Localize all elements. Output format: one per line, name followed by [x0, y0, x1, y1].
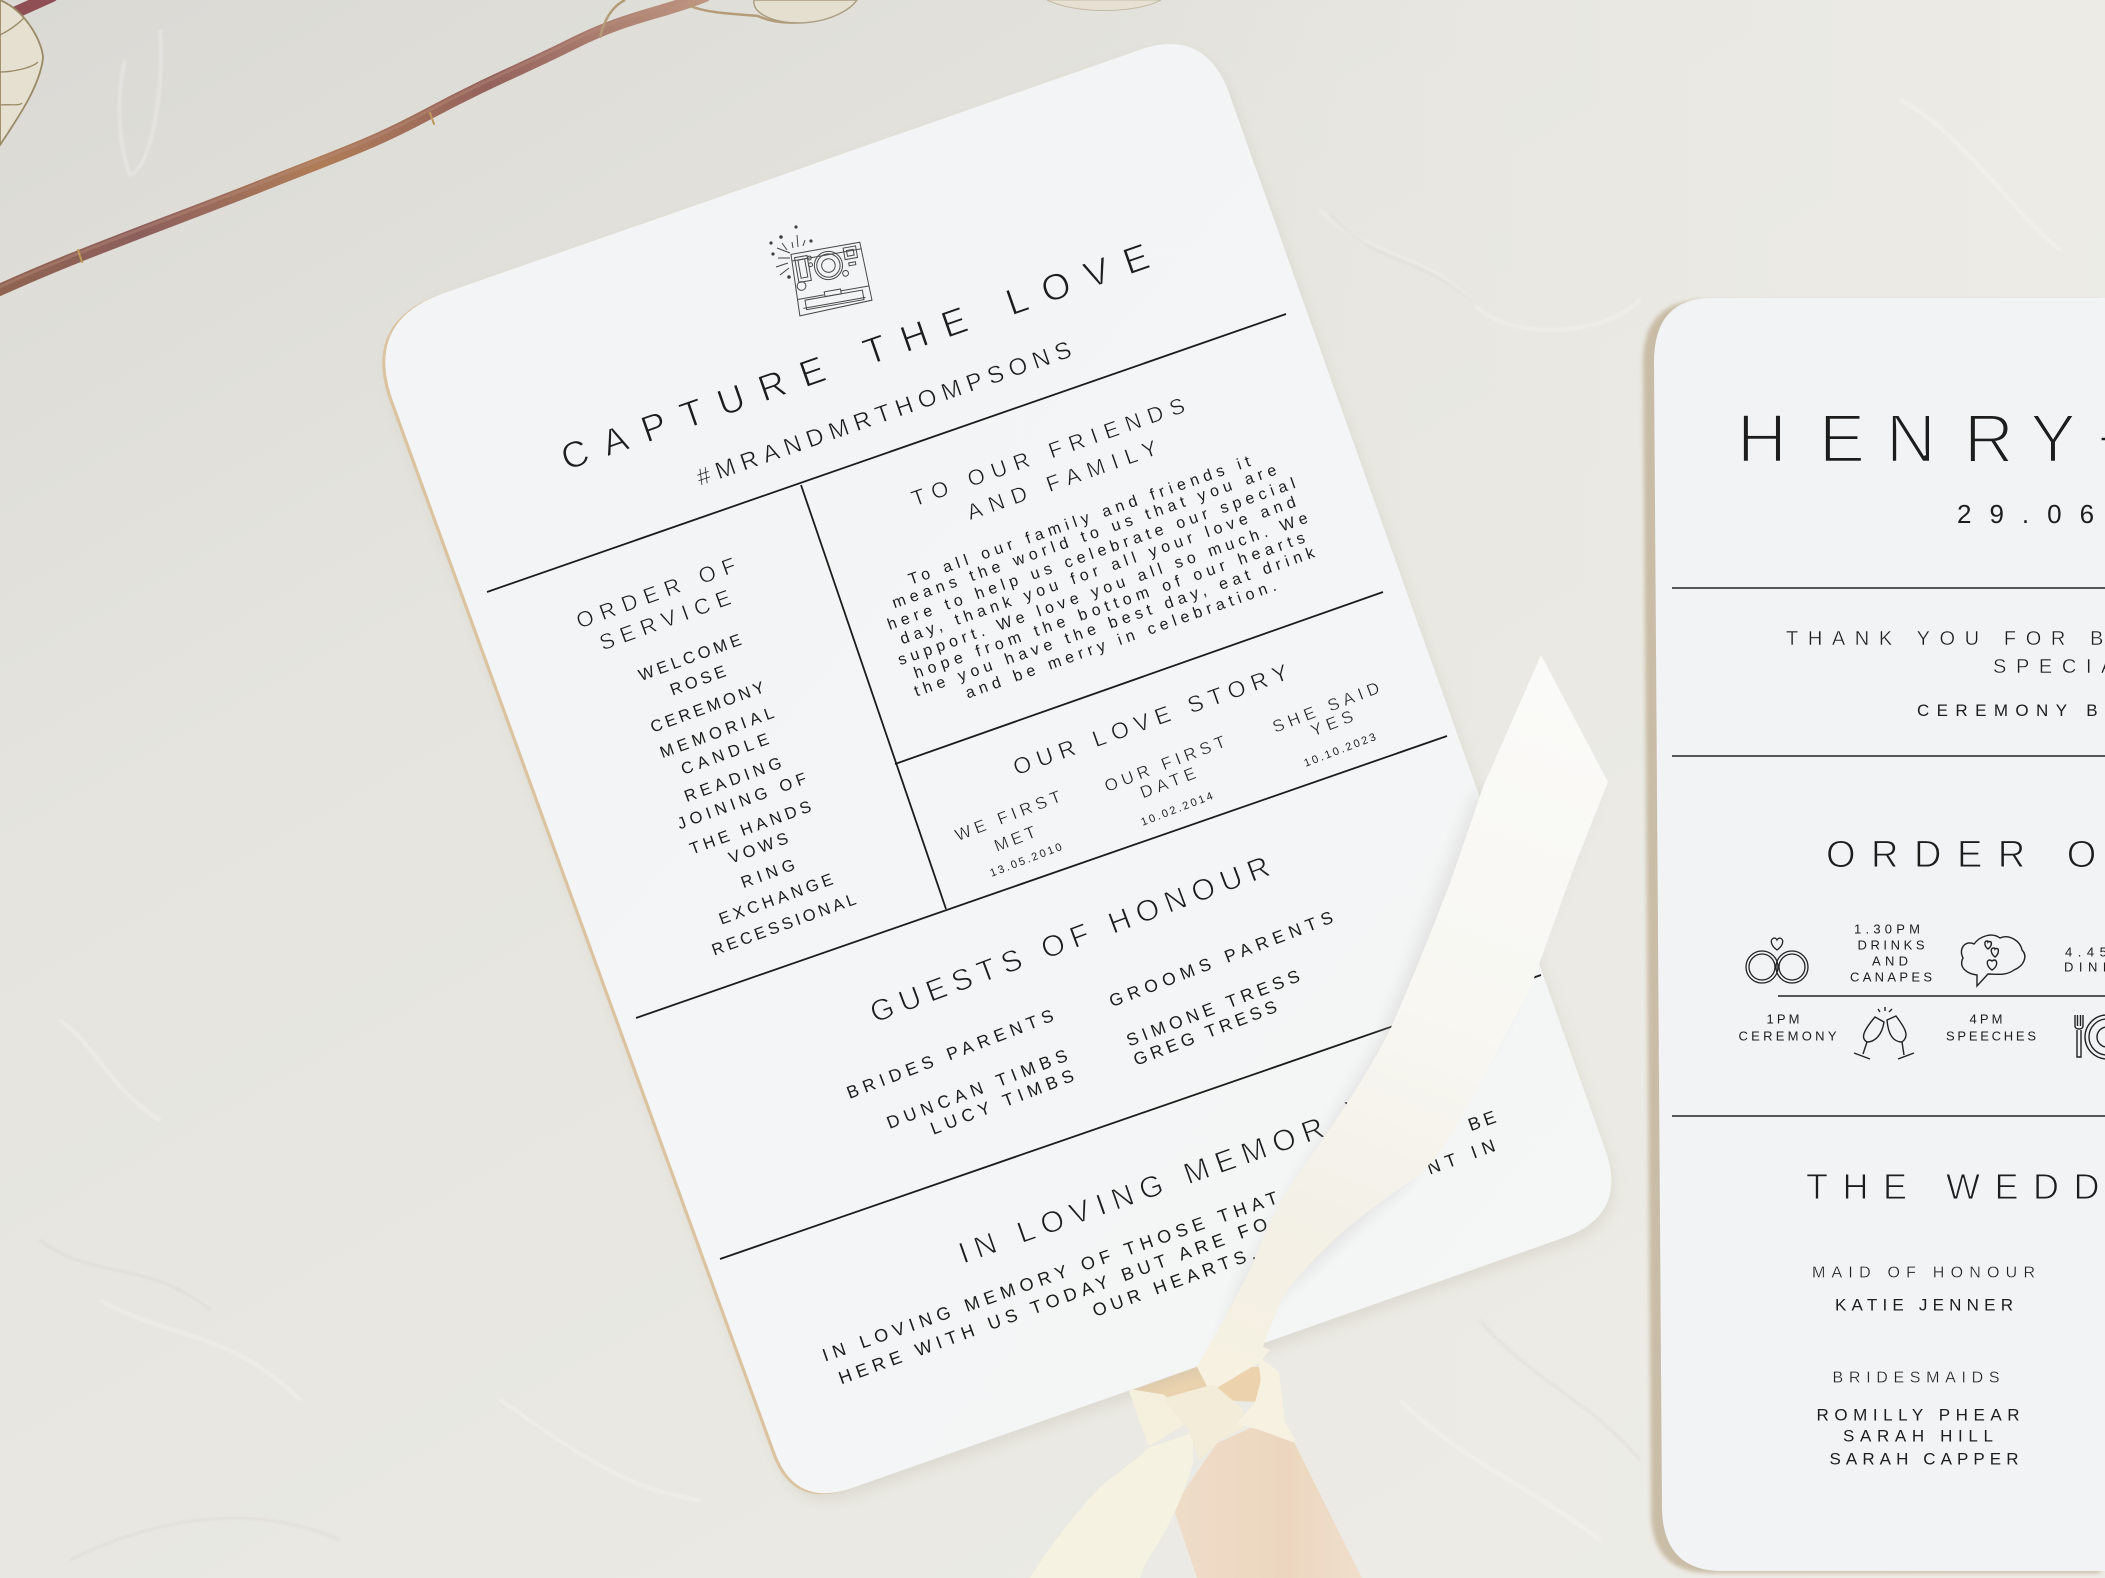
heading: our love story: OUR LOVE STORY: [1009, 659, 1292, 780]
message body: support. We love you all so much. We: [896, 510, 1310, 669]
milestone: we first met: 13.05.2010: [988, 841, 1064, 880]
heading: to our friends: AND FAMILY: [964, 435, 1161, 525]
milestone: we first met: [952, 787, 1064, 880]
icon: champagne toast: [1854, 1007, 1914, 1059]
service list: JOINING OF: [675, 770, 809, 833]
maid of honour: MAID OF HONOUR: [1812, 1264, 2035, 1282]
grooms parents: GROOMS PARENTS: [1106, 907, 1336, 1011]
heading: in loving memory: Y: [1341, 1091, 1371, 1129]
timeline: drinks and canapes: DRINKS: [1858, 938, 1925, 952]
service list: MEMORIAL: [658, 704, 776, 762]
dividers: [1672, 588, 2105, 1116]
wooden fan stick: top section: [1133, 1367, 1262, 1402]
service list: VOWS: [726, 829, 791, 868]
card shadow: [387, 51, 1613, 1500]
card edge: [382, 45, 1608, 1494]
grooms parents: SIMONE TRESS: [1124, 966, 1302, 1050]
timeline: speeches: 4PM: [1970, 1012, 2002, 1026]
wooden fan stick: [1173, 1427, 1362, 1578]
panel: wedding programme card: [1654, 298, 2105, 1571]
icon: fork and plate: [2075, 1015, 2105, 1059]
brides parents: DUNCAN TIMBS: [884, 1045, 1070, 1133]
timeline: ceremony: CEREMONY: [1738, 1028, 1837, 1044]
milestone: our first date: [1102, 732, 1228, 829]
message body: means the world to us that you are: [890, 462, 1279, 612]
message body: hope from the bottom of our hearts: [912, 530, 1307, 682]
icon: instant camera: [770, 226, 872, 316]
heading: order of service: SERVICE: [596, 585, 734, 655]
heading: guests of honour: GUESTS OF HONOUR: [866, 850, 1274, 1030]
timeline: ceremony: 1PM: [1766, 1012, 1800, 1026]
milestone: our first date: DATE: [1138, 764, 1198, 802]
brides parents: BRIDES PARENTS: [844, 1005, 1056, 1103]
dividers: [487, 314, 1541, 1259]
maid of honour: [1812, 1264, 2035, 1314]
panel: order of service: [573, 553, 858, 959]
icon: speech cloud with hearts: [1961, 935, 2025, 986]
timeline: drinks and canapes: 1.30PM: [1854, 922, 1920, 936]
right card shadow: [1643, 300, 2100, 1573]
service list: CANDLE: [679, 730, 771, 779]
thank you message: [1786, 628, 2105, 678]
service list: RING: [739, 856, 797, 892]
service list: READING: [682, 754, 784, 806]
panel: fan card: [385, 44, 1611, 1493]
heading: capture the love: CAPTURE THE LOVE: [556, 236, 1154, 478]
service list: ROSE: [668, 663, 728, 699]
milestone: we first met: MET: [992, 822, 1038, 856]
brides parents: [844, 1005, 1077, 1139]
bridesmaids: SARAH HILL: [1843, 1426, 1993, 1446]
heading: to our friends: TO OUR FRIENDS: [908, 393, 1188, 511]
heading: the wedding party: THE WEDD: [1806, 1166, 2105, 1207]
timeline: ceremony: [1738, 1012, 1837, 1044]
panel: to our friends and family: [885, 393, 1318, 702]
panel: in loving memory: [820, 1091, 1499, 1388]
message body: the you have the best day, eat drink: [912, 544, 1318, 700]
bridesmaids: ROMILLY PHEAR: [1816, 1406, 2020, 1424]
service list: WELCOME: [636, 631, 744, 685]
memorial message: REVER PRESE: [1286, 1166, 1410, 1228]
milestone: our first date: 10.02.2014: [1139, 790, 1215, 829]
bridesmaids: [1816, 1370, 2020, 1468]
message body: day, thank you for all your love and: [898, 494, 1298, 648]
memorial message: NT IN: [1424, 1135, 1498, 1179]
ribbon tail: [1030, 1433, 1193, 1578]
ribbon: [1197, 655, 1608, 1392]
dried stem branch: [0, 0, 705, 292]
timeline: drinks and canapes: AND: [1872, 954, 1908, 968]
timeline: speeches: SPEECHES: [1946, 1028, 2036, 1044]
service list: THE HANDS: [687, 798, 814, 858]
grooms parents: GREG TRESS: [1130, 996, 1280, 1070]
milestone: she said yes: YES: [1308, 707, 1356, 740]
memorial message: CANNOT: [1339, 1136, 1431, 1184]
service list: RECESSIONAL: [710, 891, 858, 959]
bridesmaids: SARAH CAPPER: [1830, 1450, 2018, 1468]
heading: in loving memory: IN LOVING MEMOR: [954, 1111, 1329, 1271]
message body: [885, 453, 1318, 702]
panel: guests of honour: [844, 850, 1336, 1139]
grooms parents: [1106, 907, 1336, 1070]
heading: order of: ORDER O: [1826, 834, 2105, 876]
bridesmaids: BRIDESMAIDS: [1832, 1370, 2000, 1386]
timeline: drinks and canapes: [1850, 922, 1932, 984]
milestone: she said yes: 10.10.2023: [1302, 731, 1378, 770]
memorial message: BE: [1465, 1107, 1499, 1135]
service list: EXCHANGE: [717, 871, 835, 928]
service list: CEREMONY: [648, 679, 767, 736]
milestone: we first met: WE FIRST: [952, 787, 1064, 845]
memorial message: IN LOVING MEMORY OF THOSE THAT: [820, 1188, 1280, 1365]
hashtag: #MRANDMRTHOMPSONS: [693, 336, 1075, 492]
maid of honour: KATIE JENNER: [1835, 1296, 2013, 1314]
milestone: she said yes: [1270, 678, 1382, 770]
seed pods: [0, 0, 1161, 145]
icon: wedding rings: [1746, 938, 1808, 983]
milestone: our first date: OUR FIRST: [1102, 732, 1228, 796]
memorial message: [820, 1107, 1499, 1388]
memorial message: OUR HEARTS.: [1090, 1243, 1258, 1321]
panel: our love story: [952, 659, 1382, 880]
heading: order of service: ORDER OF: [573, 553, 739, 633]
memorial message: HERE WITH US TODAY BUT ARE FO: [836, 1214, 1270, 1388]
ribbon shadow: [1201, 788, 1599, 1396]
thank you message: THANK YOU FOR B: [1786, 628, 2105, 650]
service list: [636, 631, 858, 959]
timeline: speeches: [1946, 1012, 2036, 1044]
message body: To all our family and friends it: [906, 453, 1253, 589]
message body: here to help us celebrate our special: [885, 475, 1298, 634]
milestone: she said yes: SHE SAID: [1270, 678, 1382, 737]
message body: and be merry in celebration.: [963, 578, 1279, 702]
timeline: dinner: [2064, 945, 2105, 975]
timeline: drinks and canapes: CANAPES: [1850, 970, 1932, 984]
brides parents: LUCY TIMBS: [927, 1065, 1077, 1139]
ribbon knot: [1132, 1360, 1293, 1457]
